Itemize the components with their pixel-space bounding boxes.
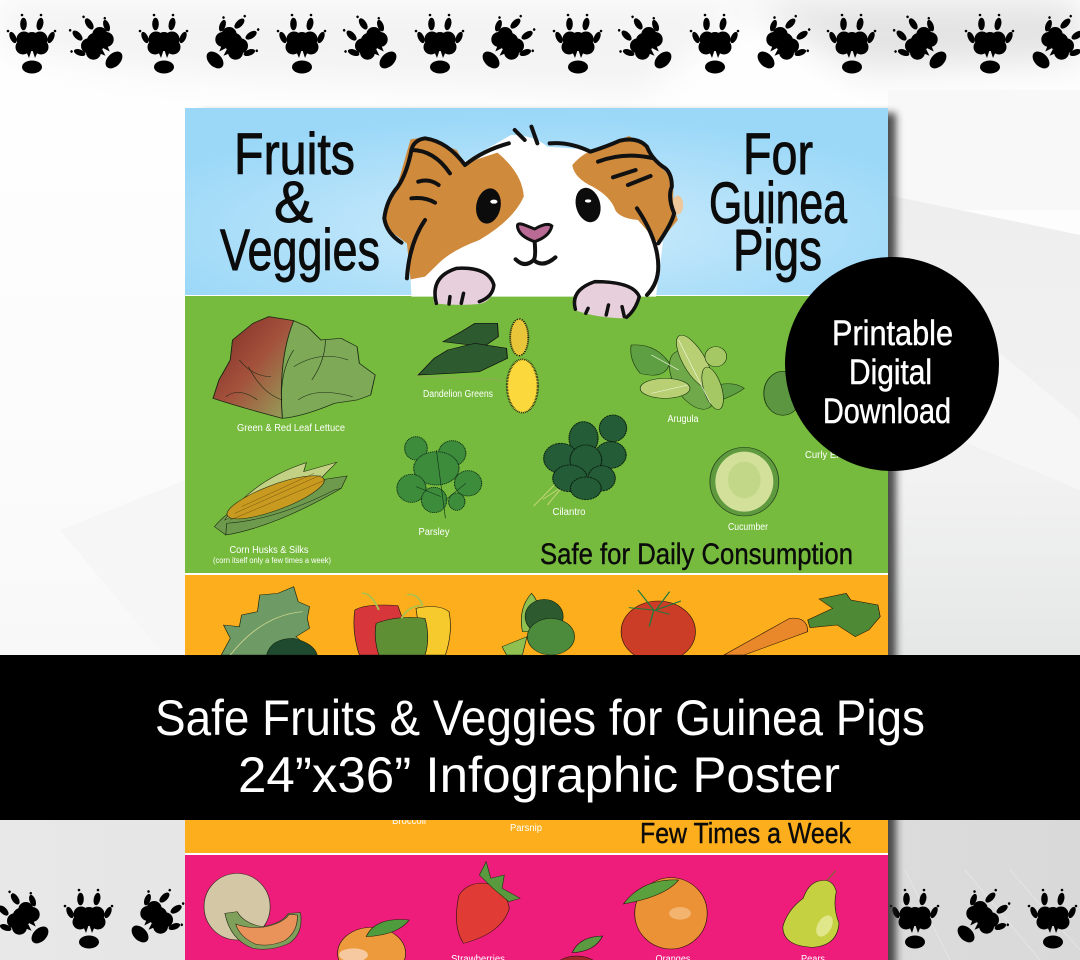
heading: Safe for Daily Consumption: Safe for Daily Consumption	[540, 538, 853, 571]
section: orange veggies	[221, 587, 880, 662]
panel: header sky	[185, 108, 888, 295]
badge: Printable Digital Download: Digital	[849, 353, 932, 392]
row of paw prints, top	[7, 4, 1080, 82]
poster drop shadow	[200, 113, 896, 960]
illustration: corn husk and silks	[214, 462, 347, 535]
caption: corn note: (corn itself only a few times a week)	[213, 556, 331, 565]
caption: Parsley: Parsley	[418, 527, 450, 538]
section: green veggies	[213, 317, 802, 535]
illustration: arugula	[631, 332, 744, 414]
caption: Corn Husks & Silks: Corn Husks & Silks	[230, 545, 308, 556]
heading: For Guinea Pigs: Pigs	[733, 218, 822, 283]
section: pink fruits	[204, 862, 839, 960]
panel: few times a week	[185, 575, 888, 853]
caption: Parsnip: Parsnip	[510, 823, 542, 834]
heading: Fruits & Veggies: Fruits	[234, 122, 355, 187]
illustration: parsley	[397, 437, 482, 518]
badge: Printable Digital Download: Download	[823, 392, 951, 431]
heading: For Guinea Pigs: For	[743, 122, 813, 187]
heading: Fruits & Veggies	[220, 122, 380, 283]
row of paw prints, bottom	[0, 878, 1077, 957]
illustration: strawberry	[456, 862, 520, 943]
banner: poster title strip	[0, 655, 1080, 820]
caption: Arugula: Arugula	[668, 414, 699, 425]
caption: Cucumber: Cucumber	[728, 522, 769, 533]
illustration: pear	[783, 871, 839, 947]
illustration: cucumber slice	[710, 447, 779, 516]
illustration: tomato	[621, 590, 695, 662]
banner: poster title strip: 24”x36” Infographic Poster	[238, 747, 840, 803]
illustration: kale	[221, 587, 317, 655]
heading: Few Times a Week: Few Times a Week	[640, 818, 851, 850]
heading: For Guinea Pigs: Guinea	[709, 171, 848, 236]
caption: Cilantro: Cilantro	[552, 507, 586, 518]
illustration: orange	[623, 878, 707, 949]
illustration: dandelion greens	[417, 319, 538, 413]
badge: Printable Digital Download	[785, 257, 999, 471]
banner: poster title strip: Safe Fruits & Veggies for Guinea Pigs	[155, 690, 925, 746]
caption: Broccoli: Broccoli	[392, 816, 426, 827]
caption: Green & Red Leaf Lettuce: Green & Red Leaf Lettuce	[237, 423, 345, 434]
illustration: bell peppers	[354, 593, 450, 655]
illustration: curly endive	[764, 371, 802, 415]
heading: Fruits & Veggies: Veggies	[220, 218, 380, 283]
caption: Curly Endive: Curly Endive	[805, 450, 859, 461]
heading: For Guinea Pigs	[709, 122, 848, 283]
illustration: guinea pig peeking	[384, 127, 683, 318]
illustration: cantaloupe	[204, 873, 301, 949]
illustration: apple	[550, 936, 604, 960]
poster	[185, 108, 888, 960]
illustration: peach	[338, 920, 409, 960]
panel: occasional fruits	[185, 855, 888, 960]
illustration: cilantro	[534, 415, 627, 506]
poster sheet	[185, 108, 888, 960]
panel: safe for daily consumption	[185, 296, 888, 573]
caption: Dandelion Greens: Dandelion Greens	[423, 389, 493, 400]
illustration: spinach	[502, 593, 574, 655]
illustration: lettuce	[213, 317, 375, 418]
heading: Fruits & Veggies: &	[274, 170, 313, 235]
illustration: carrot	[724, 593, 880, 655]
badge: Printable Digital Download: Printable	[832, 314, 953, 353]
